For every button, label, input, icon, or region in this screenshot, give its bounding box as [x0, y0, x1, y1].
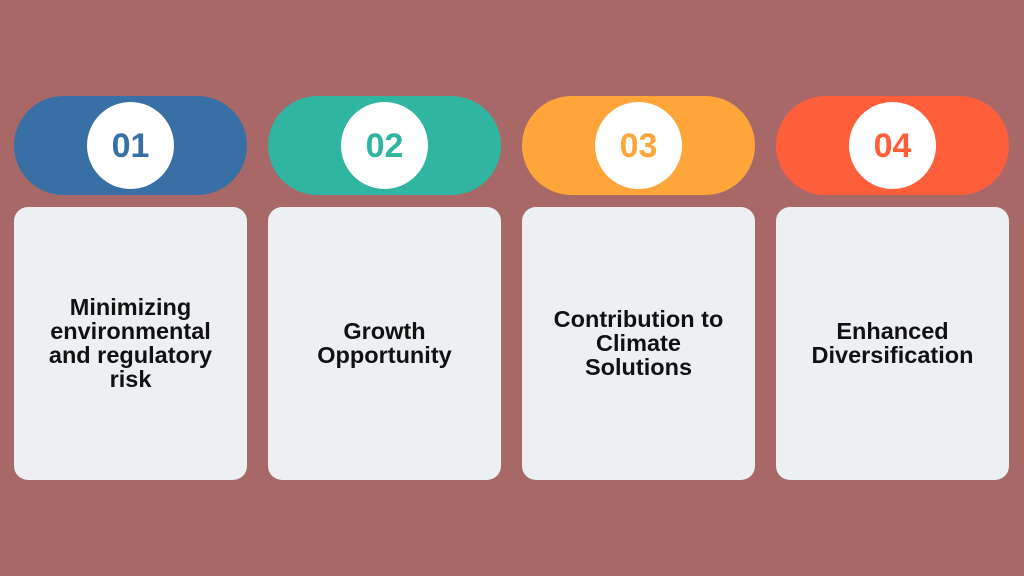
- pill 01: [14, 96, 247, 195]
- text 02: [317, 318, 452, 368]
- number 03: [595, 102, 682, 189]
- number 04: 04: [874, 127, 911, 165]
- card 03: [522, 207, 755, 480]
- pill 04: [776, 96, 1009, 195]
- number 02: 02: [366, 127, 403, 165]
- text 03: Solutions: [585, 354, 692, 380]
- pill 02: [268, 96, 501, 195]
- text 01: Minimizing environmental and regulatory risk: [49, 294, 212, 392]
- text 03: Climate: [596, 330, 681, 356]
- number 02: [341, 102, 428, 189]
- text 02: Growth: [343, 318, 426, 344]
- text 04: Enhanced: [836, 318, 949, 344]
- number 03: 03: [620, 127, 657, 165]
- text 03: Contribution to: [554, 306, 723, 332]
- text 04: [812, 318, 973, 368]
- card 02: [268, 207, 501, 480]
- number 04: [849, 102, 936, 189]
- text 03: [554, 306, 723, 380]
- text 04: Diversification: [812, 342, 973, 368]
- card 01: [14, 207, 247, 480]
- pill 03: [522, 96, 755, 195]
- number 01: [87, 102, 174, 189]
- card 04: [776, 207, 1009, 480]
- number 01: 01: [112, 127, 149, 165]
- text 02: Opportunity: [317, 342, 452, 368]
